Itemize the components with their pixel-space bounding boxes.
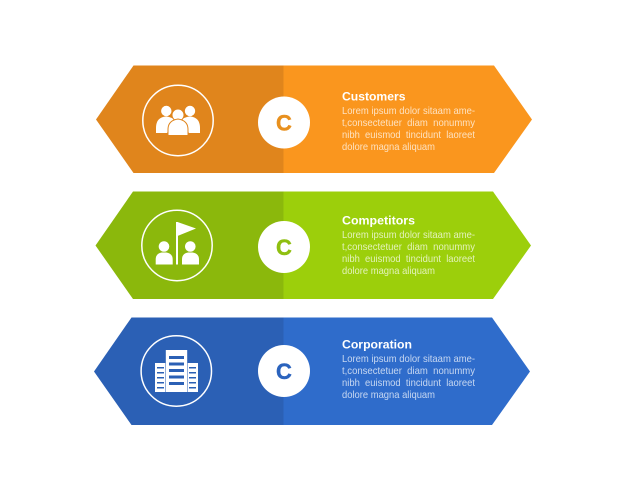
badge: letter C: C	[276, 110, 292, 136]
text block: customers: Lorem ipsum dolor sitaam ame-	[342, 105, 475, 117]
arrow shape: corporation left	[94, 318, 284, 425]
panel: competitors	[96, 192, 531, 299]
text block: corporation: dolore magna aliquam	[342, 389, 435, 401]
text block: customers: nibh euismod tincidunt laoreet	[342, 129, 475, 141]
arrow shape: competitors left	[96, 192, 284, 299]
text block: customers: Customers	[342, 92, 406, 104]
panel: corporation	[94, 318, 530, 425]
text block: corporation: Corporation	[342, 340, 412, 352]
text block: corporation: t,consectetuer diam nonummy	[342, 365, 476, 377]
text block: corporation	[342, 340, 476, 401]
icon: people group	[143, 85, 213, 156]
text block: customers	[342, 92, 476, 153]
text block: customers: t,consectetuer diam nonummy	[342, 117, 476, 129]
badge: letter C	[258, 221, 310, 273]
text block: competitors	[342, 216, 476, 277]
badge: letter C: C	[276, 359, 292, 384]
text block: corporation: Lorem ipsum dolor sitaam ame-	[342, 353, 475, 365]
badge: letter C: C	[276, 235, 292, 260]
badge: letter C	[258, 96, 310, 148]
text block: competitors: Lorem ipsum dolor sitaam ame-	[342, 229, 475, 241]
arrow shape: competitors right	[284, 192, 531, 299]
badge: letter C	[258, 345, 310, 397]
text block: corporation: nibh euismod tincidunt laoreet	[342, 377, 475, 389]
icon: flag between two people	[142, 210, 212, 281]
arrow shape: customers right	[284, 66, 532, 173]
text block: competitors: nibh euismod tincidunt laoreet	[342, 253, 475, 265]
text block: customers: dolore magna aliquam	[342, 141, 435, 153]
arrow shape: customers left	[96, 66, 284, 173]
arrow shape: corporation right	[284, 318, 530, 425]
icon: office buildings	[141, 336, 212, 406]
text block: competitors: Competitors	[342, 216, 415, 228]
text block: competitors: dolore magna aliquam	[342, 265, 435, 277]
text block: competitors: t,consectetuer diam nonummy	[342, 241, 476, 253]
panel: customers	[96, 66, 532, 173]
